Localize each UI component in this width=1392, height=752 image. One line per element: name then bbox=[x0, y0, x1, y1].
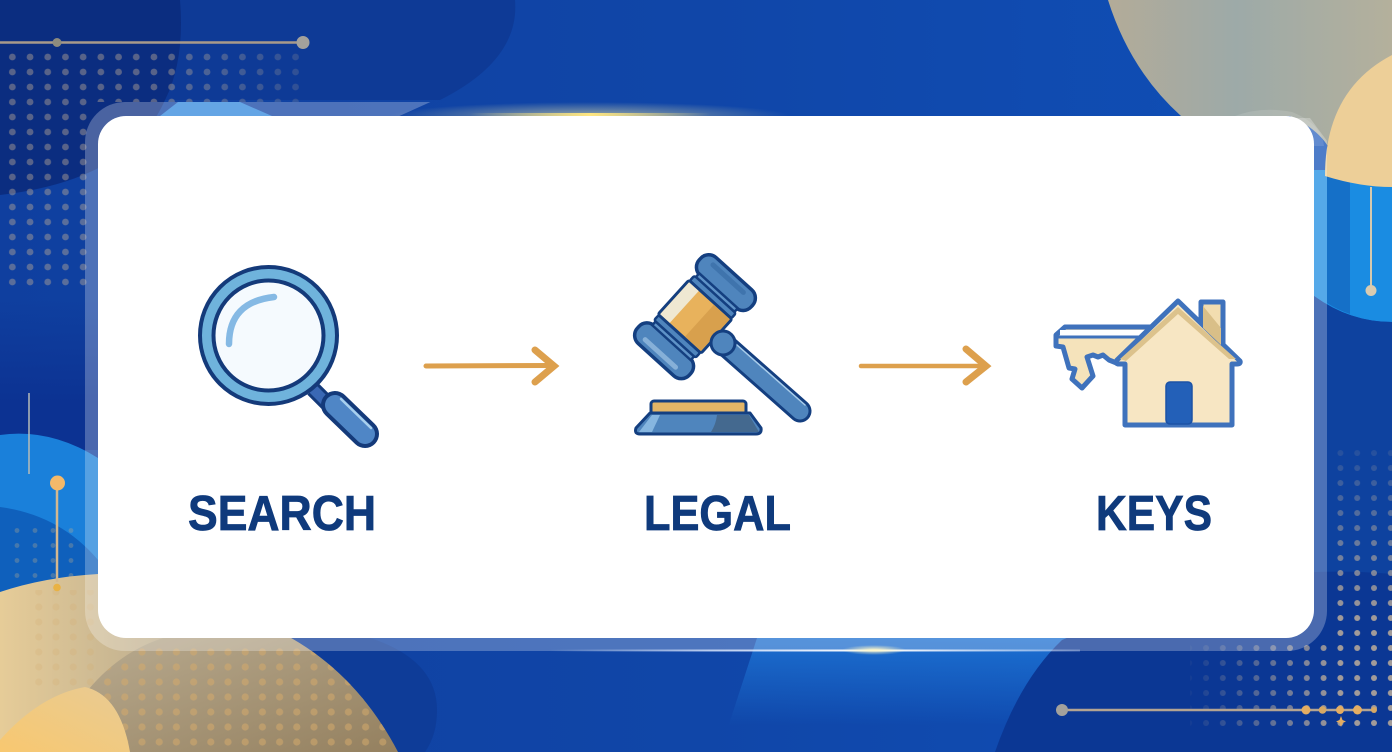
label: SEARCH: SEARCH bbox=[188, 487, 376, 541]
shapes: top-right sand circle bbox=[1108, 0, 1392, 187]
decorative line: left orange bbox=[50, 476, 65, 591]
gavel handle bbox=[723, 343, 805, 411]
gavel head bbox=[630, 250, 760, 383]
label: KEYS: KEYS bbox=[1096, 487, 1212, 541]
glass corner: top-right bbox=[1235, 110, 1324, 146]
glass border around panel bbox=[85, 102, 1327, 651]
glow: top edge bbox=[470, 113, 710, 116]
icon: gavel bbox=[630, 250, 805, 434]
key bbox=[1056, 327, 1155, 388]
decorative line: right vertical bbox=[1366, 187, 1376, 296]
decorative line: top-left bbox=[0, 36, 310, 49]
house bbox=[1116, 301, 1240, 425]
glow: bottom line bbox=[550, 650, 1080, 652]
arrow: search to legal bbox=[426, 350, 554, 382]
icon: magnifying glass bbox=[200, 267, 371, 434]
label: LEGAL: LEGAL bbox=[644, 487, 791, 541]
decorative line: bottom-right bbox=[1056, 704, 1377, 727]
arrow: legal to keys bbox=[861, 349, 986, 382]
gavel base bbox=[636, 401, 761, 434]
icon: key and house bbox=[1056, 301, 1240, 425]
glow: top haze bbox=[390, 102, 790, 130]
panel: white card bbox=[98, 116, 1314, 638]
dot pattern: right bbox=[1337, 450, 1392, 636]
decorative line: left vertical bbox=[28, 393, 30, 474]
dot pattern: left bbox=[8, 523, 83, 593]
dot pattern: top-left bbox=[3, 50, 300, 287]
glow: bottom spark bbox=[842, 645, 906, 655]
shapes: bottom-left sand circles bbox=[0, 574, 398, 752]
dot pattern: bottom-right bbox=[1190, 645, 1392, 726]
